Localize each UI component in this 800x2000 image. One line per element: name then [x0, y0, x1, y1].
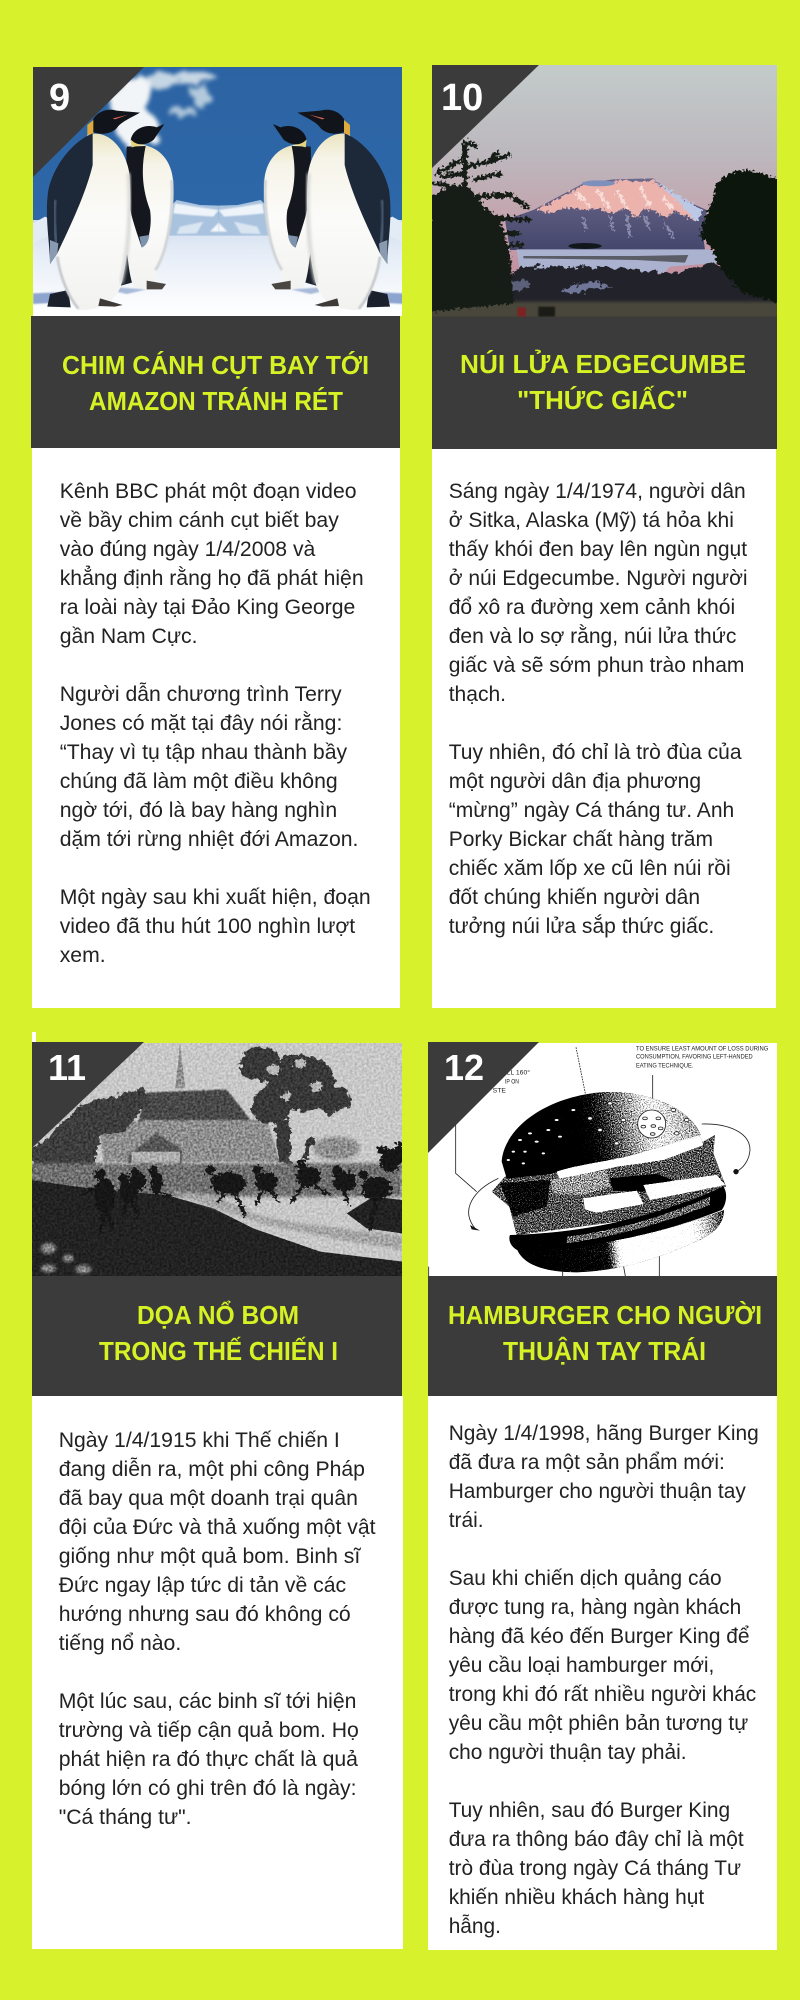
panel: 10 volcano	[432, 65, 777, 1008]
title text: CHIM CÁNH CỤT BAY TỚI	[62, 350, 369, 380]
decorative white nub	[32, 1032, 36, 1043]
diagram captions: STE	[493, 1087, 506, 1094]
title bar	[432, 317, 777, 449]
body text: Ngày 1/4/1998, hãng Burger King đã đưa ra một sản phẩm mới: Hamburger cho người thuận tay trái. Sau khi chiến dịch quảng cáo được tung ra, hàng ngàn khách hàng đã kéo đến Burger King để yêu cầu loại hamburger mới, trong khi đó rất nhiều người khác yêu cầu một phiên bản tương tự cho người thuận tay phải. Tuy nhiên, sau đó Burger King đưa ra thông báo đây chỉ là một trò đùa trong ngày Cá tháng Tư khiến nhiều khách hàng hụt hẫng.	[449, 1422, 759, 1938]
left conifer	[430, 140, 530, 312]
body card	[428, 1396, 777, 1950]
diagram captions: EATING TECHNIQUE.	[636, 1062, 694, 1069]
photo: mount Edgecumbe	[432, 65, 777, 317]
diagram captions	[493, 1046, 768, 1094]
title text	[460, 348, 746, 415]
body text: Kênh BBC phát một đoạn video về bầy chim cánh cụt biết bay vào đúng ngày 1/4/2008 và khẳng định rằng họ đã phát hiện ra loài này tại Đảo King George gần Nam Cực. Người dẫn chương trình Terry Jones có mặt tại đây nói rằng: “Thay vì tụ tập nhau thành bầy chúng đã làm một điều không ngờ tới, đó là bay hàng nghìn dặm tới rừng nhiệt đới Amazon. Một ngày sau khi xuất hiện, đoạn video đã thu hút 100 nghìn lượt xem.	[60, 480, 371, 967]
right tree	[700, 169, 780, 303]
seeds	[507, 1109, 575, 1164]
soldiers	[83, 1143, 402, 1233]
title text: DỌA NỔ BOM	[137, 1300, 299, 1330]
title text	[448, 1300, 762, 1366]
number badge 9	[33, 67, 144, 177]
title text: HAMBURGER CHO NGƯỜI	[448, 1300, 762, 1330]
title text: NÚI LỬA EDGECUMBE	[460, 348, 746, 379]
title bar	[31, 316, 400, 448]
diagram captions: LL 160°	[507, 1069, 530, 1077]
number badge 12	[428, 1042, 539, 1153]
photo: WWI soldiers	[32, 1043, 402, 1276]
diagram captions: IP ON	[505, 1079, 519, 1086]
photo: penguins	[33, 67, 402, 316]
panel: 12 left-handed hamburger	[428, 1042, 777, 1950]
title text: TRONG THẾ CHIẾN I	[99, 1336, 338, 1366]
title bar	[32, 1276, 402, 1396]
title text	[99, 1300, 338, 1366]
body text: Sáng ngày 1/4/1974, người dân ở Sitka, Alaska (Mỹ) tá hỏa khi thấy khói đen bay lên ngùn ngụt ở núi Edgecumbe. Người người đổ xô ra đường xem cảnh khói đen và lo sợ rằng, núi lửa thức giấc và sẽ sớm phun trào nham thạch. Tuy nhiên, đó chỉ là trò đùa của một người dân địa phương “mừng” ngày Cá tháng tư. Anh Porky Bickar chất hàng trăm chiếc xăm lốp xe cũ lên núi rồi đốt chúng khiến người dân tưởng núi lửa sắp thức giấc.	[449, 480, 748, 938]
number badge 12: 12	[444, 1047, 484, 1088]
body text: Ngày 1/4/1915 khi Thế chiến I đang diễn ra, một phi công Pháp đã bay qua một doanh trại quân đội của Đức và thả xuống một vật giống như một quả bom. Binh sĩ Đức ngay lập tức di tản về các hướng nhưng sau đó không có tiếng nổ nào. Một lúc sau, các binh sĩ tới hiện trường và tiếp cận quả bom. Họ phát hiện ra đó thực chất là quả bóng lớn có ghi trên đó là ngày: "Cá tháng tư".	[59, 1429, 376, 1829]
diagram captions: CONSUMPTION, FAVORING LEFT-HANDED	[636, 1054, 753, 1061]
panel: 11 WWI bomb	[32, 1042, 403, 1949]
diagram captions: TO ENSURE LEAST AMOUNT OF LOSS DURING	[636, 1046, 768, 1053]
body card	[32, 448, 400, 1008]
title bar	[428, 1276, 777, 1396]
body card	[32, 1396, 403, 1949]
title text: THUẬN TAY TRÁI	[503, 1336, 706, 1366]
number badge 10: 10	[441, 77, 483, 119]
panel: 9 penguins	[31, 67, 402, 1008]
big penguin	[47, 290, 71, 307]
number badge 11: 11	[48, 1047, 86, 1088]
body card	[432, 449, 776, 1008]
number badge 11	[32, 1042, 144, 1148]
burger	[492, 1092, 726, 1272]
number badge 10	[432, 65, 539, 168]
photo: hamburger diagram	[428, 1043, 777, 1276]
title text: AMAZON TRÁNH RÉT	[89, 386, 343, 416]
small penguin	[115, 253, 135, 287]
title text: "THỨC GIẤC"	[517, 385, 688, 415]
title text	[62, 350, 369, 416]
number badge 9: 9	[49, 77, 70, 119]
